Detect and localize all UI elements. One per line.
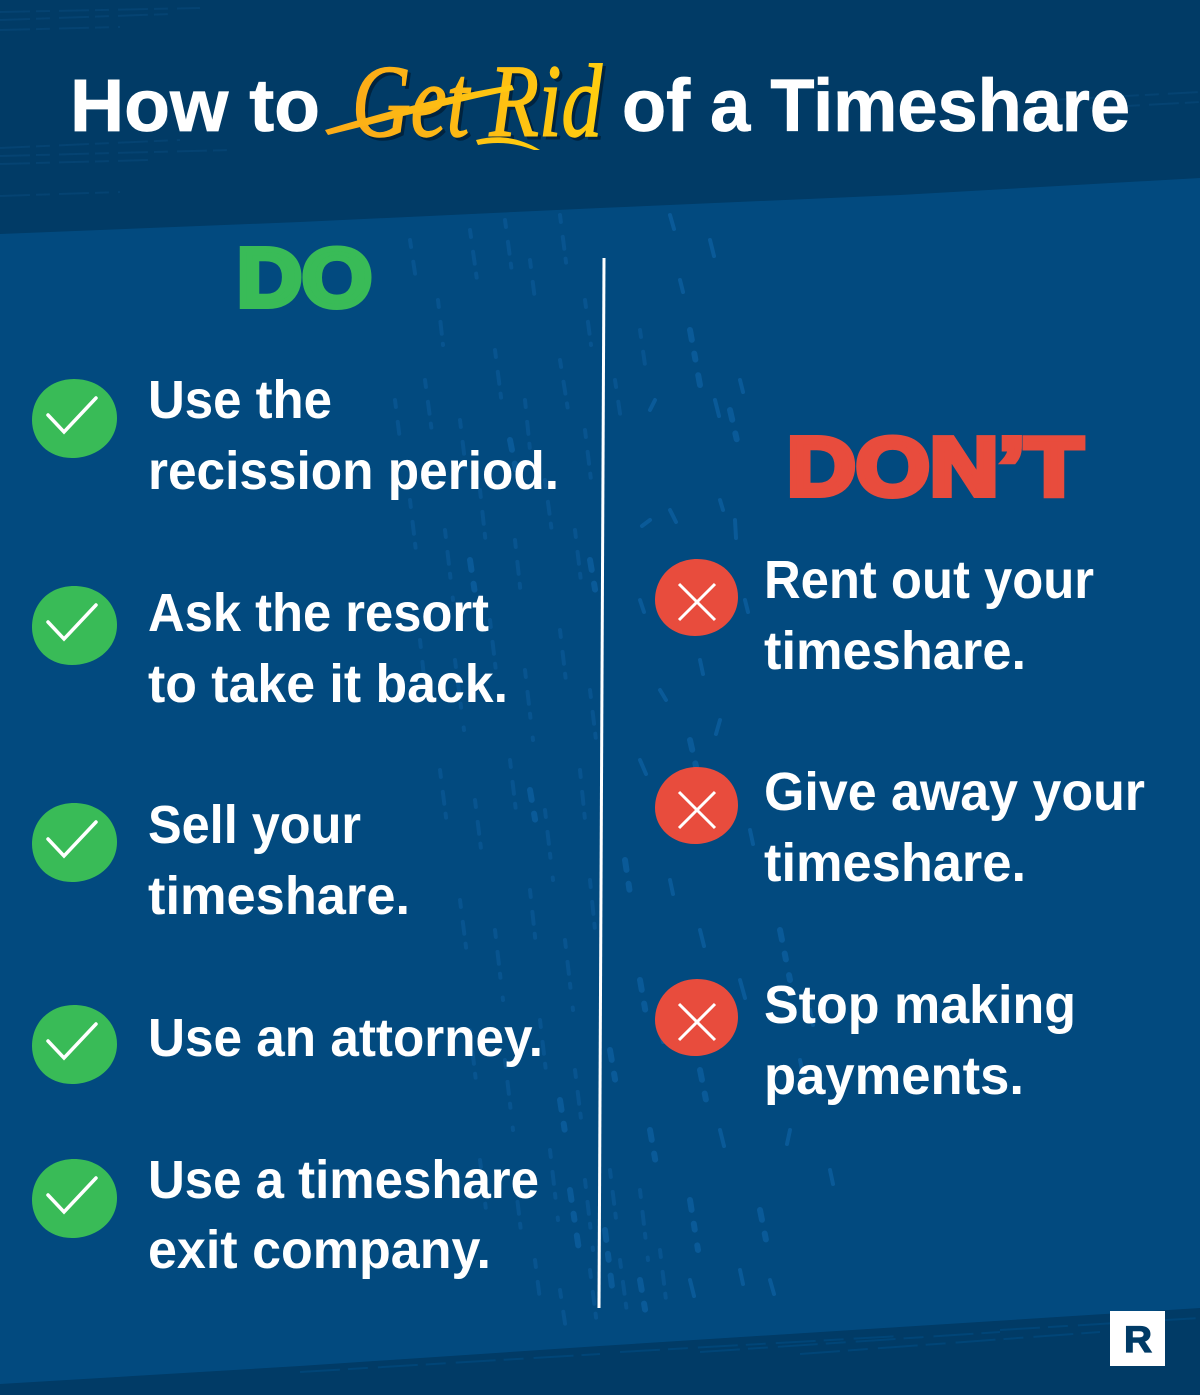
title: of a Timeshare xyxy=(622,64,1130,147)
footer band xyxy=(0,1308,1200,1395)
panel: do xyxy=(32,231,559,1280)
item: give away xyxy=(655,762,1145,893)
title xyxy=(70,44,1130,162)
item: stop making payments: Stop making xyxy=(764,975,1076,1035)
logo: R badge xyxy=(1110,1311,1165,1366)
item: use an attorney xyxy=(32,1005,543,1084)
item: exit company: exit company. xyxy=(148,1220,491,1280)
item: give away: timeshare. xyxy=(764,833,1026,893)
item: sell your timeshare: Sell your xyxy=(148,795,361,855)
item: recission period xyxy=(32,370,559,501)
item: ask the resort: Ask the resort xyxy=(148,583,489,643)
heading: DO: DO xyxy=(237,231,372,324)
item: sell your timeshare xyxy=(32,795,410,926)
icon: green check xyxy=(32,1159,117,1238)
item: sell your timeshare: timeshare. xyxy=(148,866,410,926)
heading: DON'T: DON’T xyxy=(787,420,1083,513)
item: give away: Give away your xyxy=(764,762,1145,822)
item: stop making payments xyxy=(655,975,1076,1106)
item: use an attorney: Use an attorney. xyxy=(148,1008,543,1068)
item: exit company: Use a timeshare xyxy=(148,1150,539,1210)
item: rent out: Rent out your xyxy=(764,550,1094,610)
icon: green check xyxy=(32,1005,117,1084)
panel: don't xyxy=(655,420,1145,1106)
script words: Get Rid: Get Rid xyxy=(355,47,606,162)
title: How to xyxy=(70,64,320,147)
icon: green check xyxy=(32,586,117,665)
icon: green check xyxy=(32,379,117,458)
item: stop making payments: payments. xyxy=(764,1046,1024,1106)
header band xyxy=(0,0,1200,234)
item: ask the resort xyxy=(32,583,508,714)
icon: red x xyxy=(655,559,738,636)
icon: red x xyxy=(655,979,738,1056)
icon: red x xyxy=(655,767,738,844)
item: rent out xyxy=(655,550,1094,681)
item: rent out: timeshare. xyxy=(764,621,1026,681)
icon: green check xyxy=(32,803,117,882)
script words: Get Rid: Get Rid xyxy=(352,44,603,159)
logo: R badge: R xyxy=(1124,1319,1152,1360)
item: recission period: recission period. xyxy=(148,441,559,501)
item: ask the resort: to take it back. xyxy=(148,654,508,714)
item: exit company xyxy=(32,1150,539,1280)
center divider line xyxy=(599,258,604,1308)
item: recission period: Use the xyxy=(148,370,332,430)
